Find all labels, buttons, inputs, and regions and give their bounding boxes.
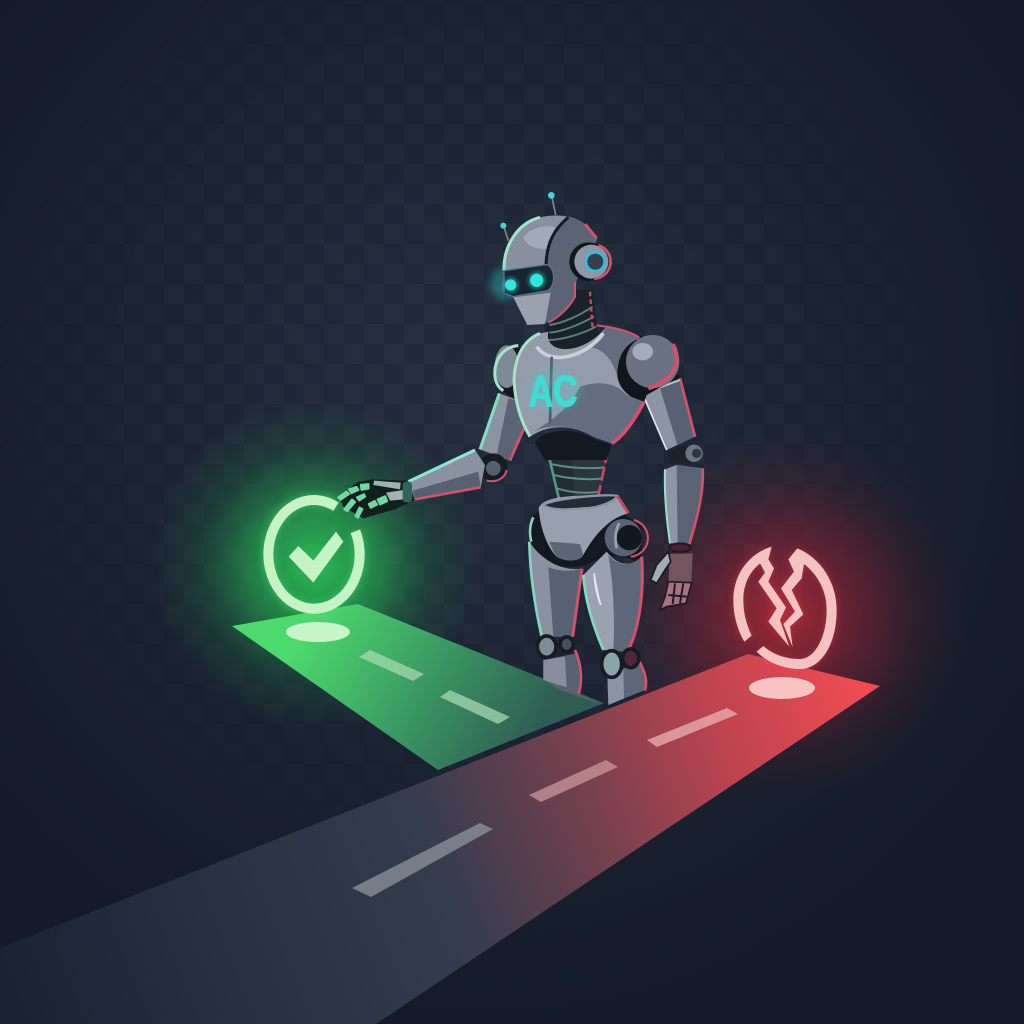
shoulder shadow: [614, 335, 680, 403]
green glow: [130, 380, 500, 750]
red glow: [590, 420, 980, 820]
chest logo: AC: [529, 367, 577, 416]
right shoulder ball: [626, 335, 679, 388]
main road dashes: [352, 708, 738, 897]
hip joint: [605, 519, 648, 557]
right upper arm: [643, 378, 695, 450]
green success path: [232, 604, 604, 770]
background: [44, 0, 888, 796]
red path spot: [749, 677, 815, 699]
left knee and shin: [537, 636, 603, 705]
green path spot: [286, 622, 350, 642]
eye glow: [490, 267, 523, 300]
leg: right thigh: [583, 552, 642, 652]
pelvis: [528, 495, 642, 567]
icon: red broken circle: [733, 547, 837, 669]
visor: [504, 265, 554, 297]
ear: [569, 242, 611, 281]
left upper arm: [480, 393, 525, 461]
right forearm: [665, 445, 703, 544]
robot upper body: [480, 192, 695, 461]
right hand: [651, 543, 693, 610]
chest lower arch: [535, 431, 612, 460]
icon: green check badge: [268, 500, 360, 609]
leg: left thigh: [529, 542, 582, 637]
waist: [545, 443, 610, 505]
antennas: [500, 192, 556, 241]
robot lower body: [528, 443, 703, 705]
eyes: [502, 271, 546, 294]
torso: [514, 325, 644, 443]
elbow: [479, 453, 507, 481]
head: [490, 215, 597, 325]
robot left forearm and hand: [338, 450, 507, 518]
neck: [542, 290, 600, 353]
hand: [338, 479, 414, 518]
right knee and shin: [602, 649, 646, 705]
left shoulder: [495, 345, 520, 398]
forearm: [408, 450, 485, 499]
main road: [0, 654, 880, 1024]
green path dashes: [359, 650, 510, 724]
